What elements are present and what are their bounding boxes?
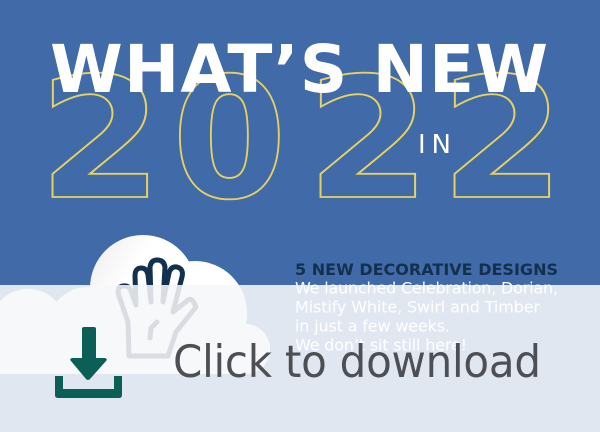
call to action: click to download: Click to download xyxy=(173,337,541,388)
body text: Mistify White, Swirl and Timber xyxy=(295,298,540,316)
cloud xyxy=(0,235,280,375)
body text xyxy=(295,278,558,354)
year outline: 2022: 0 xyxy=(172,43,287,237)
body text: We don’t sit still here! xyxy=(295,336,467,354)
title: WHAT’S NEW xyxy=(50,31,548,108)
year outline: 2022: 2 xyxy=(306,41,431,237)
label: in: IN xyxy=(418,130,451,160)
icon: hand xyxy=(118,260,196,356)
year outline: 2022: 2 xyxy=(38,41,163,237)
year outline: 2022 xyxy=(38,41,565,237)
body text: in just a few weeks. xyxy=(295,316,450,336)
text block: decorative designs xyxy=(295,260,558,354)
heading: 5 new decorative designs: 5 NEW DECORATIVE DESIGNS xyxy=(295,260,558,279)
year outline: 2022: 2 xyxy=(440,41,565,237)
icon: download xyxy=(55,327,122,398)
translucent overlay xyxy=(0,285,600,432)
body text: We launched Celebration, Dorian, xyxy=(295,278,558,298)
